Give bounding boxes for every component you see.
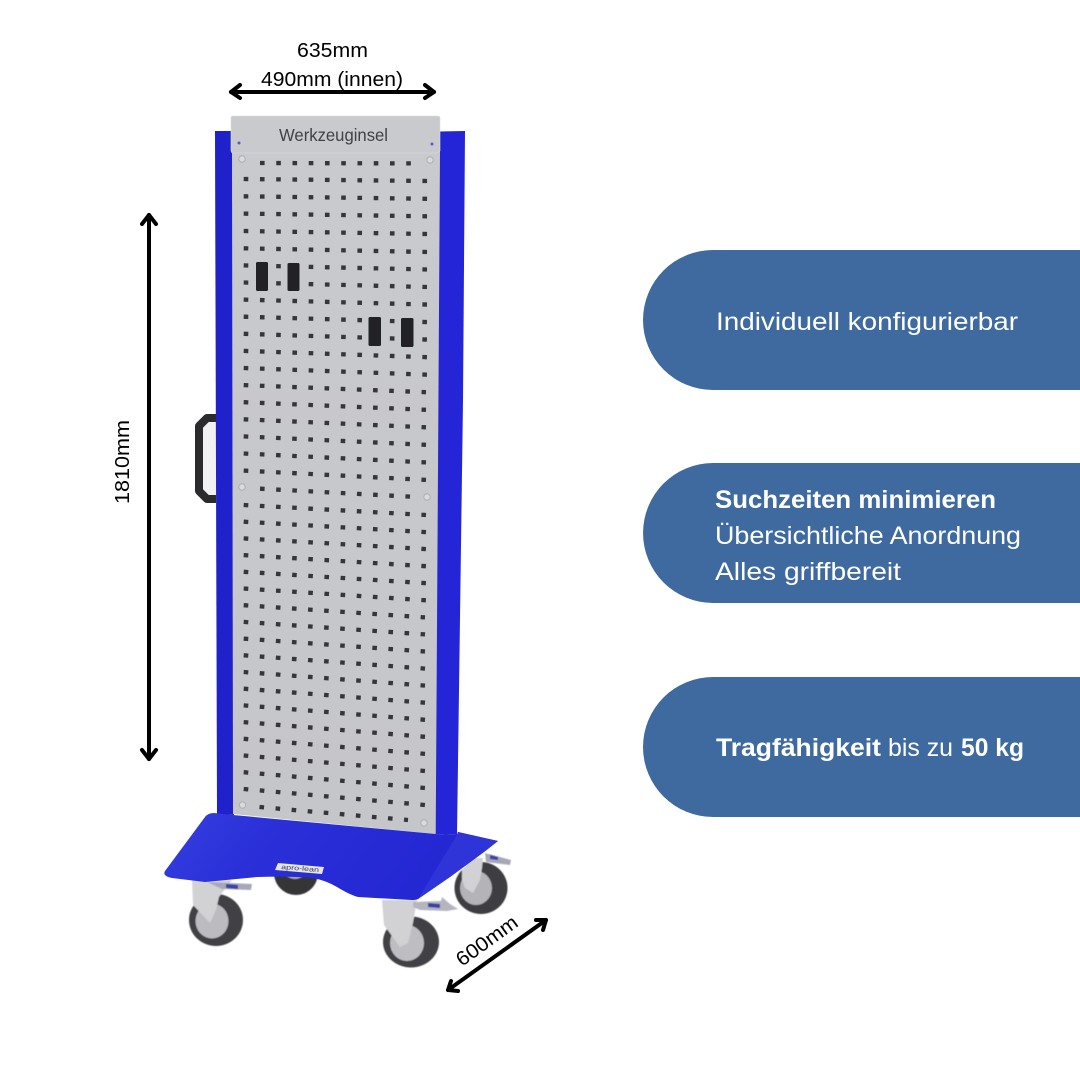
base plate — [164, 813, 498, 900]
pill: configurable — [643, 250, 1080, 390]
dimension: height arrow — [142, 215, 156, 759]
pill text block: Suchzeiten minimieren — [715, 486, 996, 514]
wheel: front left — [189, 880, 252, 946]
pill: search times — [643, 463, 1080, 603]
pill text block: Alles griffbereit — [715, 558, 901, 586]
dimension: depth label: 600mm — [452, 912, 522, 971]
wheel: rear hidden — [274, 851, 318, 895]
pill text line: 50 kg — [961, 734, 1024, 762]
pill text line: bis zu — [888, 734, 953, 762]
dimension: height label: 1810mm — [112, 420, 134, 504]
pill text line — [716, 734, 1024, 762]
wheel: back right — [454, 853, 511, 914]
dimension: depth arrow — [448, 920, 546, 991]
base plate: apro-lean — [281, 864, 320, 874]
wheel: front right — [382, 897, 458, 968]
pegboard panel — [232, 150, 440, 834]
pill text block — [715, 486, 1021, 586]
tool island frame: left blue column — [215, 131, 234, 815]
pegboard holes — [244, 163, 428, 820]
panel screws — [239, 156, 433, 826]
pill text: Individuell konfigurierbar — [716, 308, 1018, 336]
handle — [199, 418, 216, 499]
dimension: inner width label: 490mm (innen) — [261, 69, 403, 91]
sign text: Werkzeuginsel — [279, 125, 388, 145]
dimension: outer width label: 635mm — [297, 40, 368, 62]
tool island frame: right blue column — [435, 131, 465, 835]
sign plate — [231, 116, 440, 153]
dimension: width arrow — [231, 85, 434, 98]
pill: load capacity — [643, 677, 1080, 817]
pill text block: Übersichtliche Anordnung — [715, 522, 1021, 550]
pill text line: Tragfähigkeit — [716, 734, 882, 762]
logo plate — [275, 863, 324, 874]
hooks — [256, 262, 414, 347]
